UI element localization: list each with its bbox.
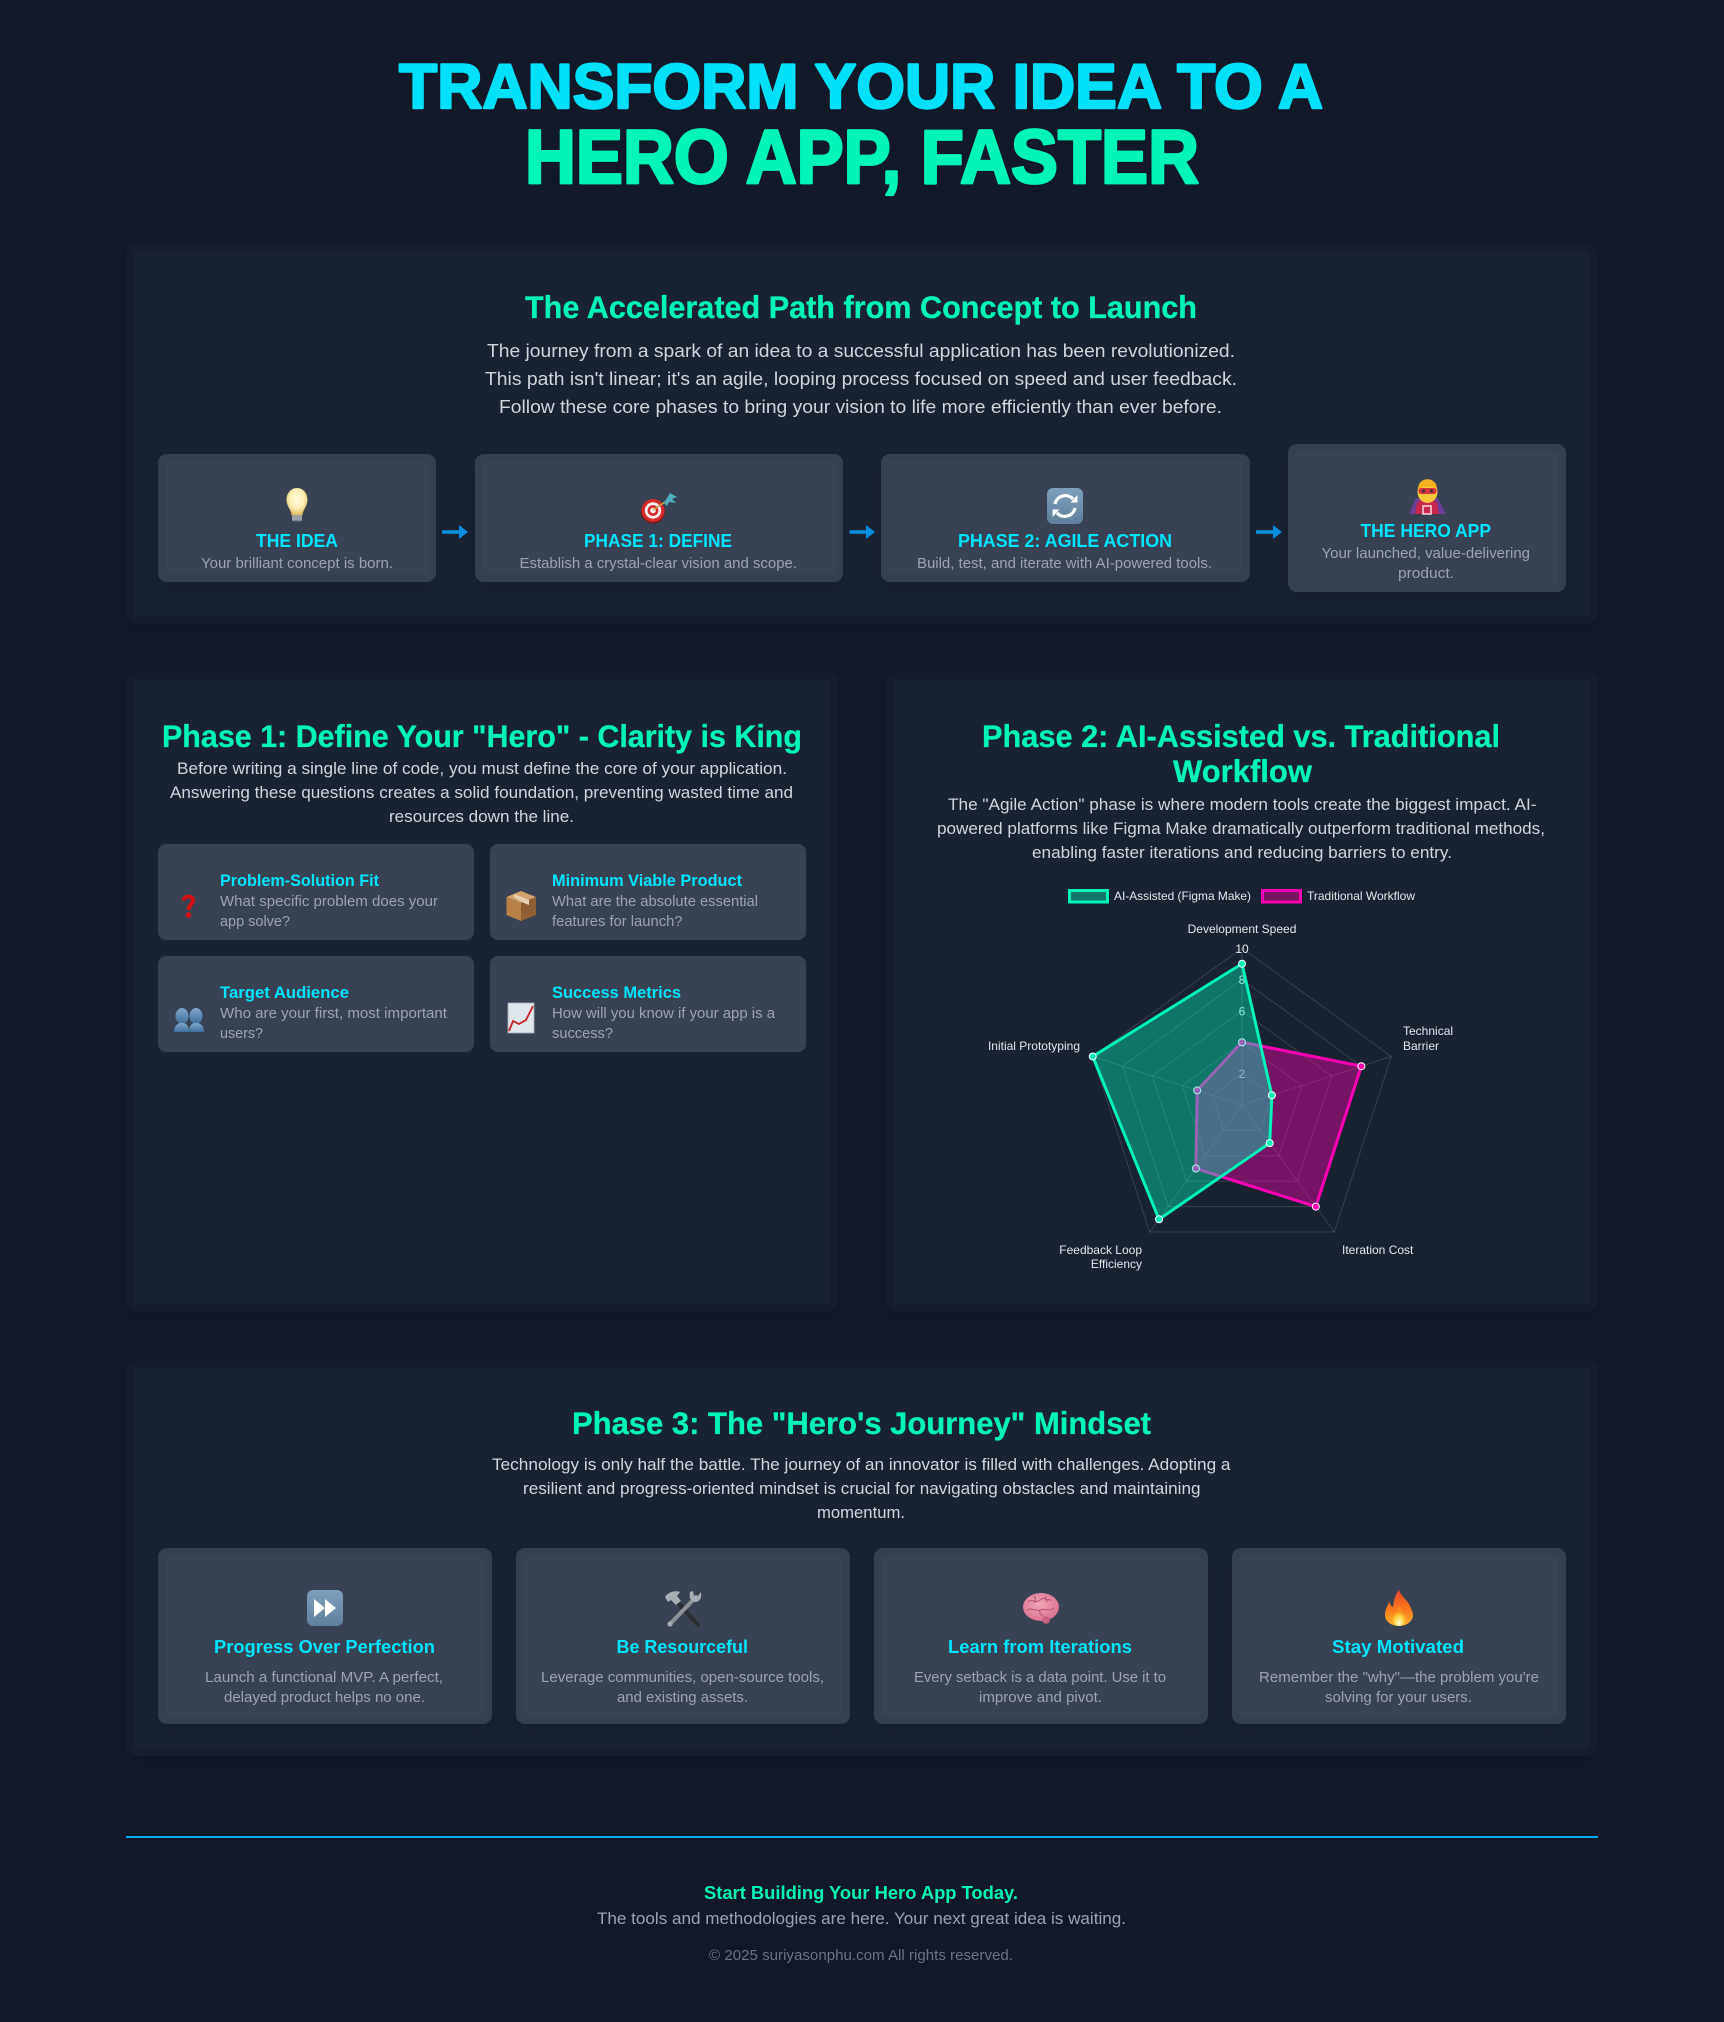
- intro text: phase 1: resources down the line.: [389, 807, 574, 826]
- radar tick labels: 8: [1239, 973, 1246, 987]
- card: target audience: users?: [220, 1026, 263, 1042]
- card: success metrics: success?: [552, 1026, 613, 1042]
- card: problem-solution fit: Problem-Solution Fit: [220, 871, 379, 890]
- card: learn from iterations: Learn from Iterations: [948, 1636, 1132, 1657]
- card: minimum viable product: features for launch?: [552, 914, 682, 930]
- intro text: accelerated path: Follow these core phases to bring your vision to life more efficiently than ever before.: [499, 396, 1222, 417]
- radar axis labels: Technical: [1403, 1024, 1453, 1038]
- icon: hammer and wrench: [665, 1591, 701, 1627]
- icon: target with dart: [641, 493, 677, 524]
- intro text: phase 1: [170, 759, 793, 826]
- intro text: phase 1: Before writing a single line of code, you must define the core of your application.: [177, 759, 787, 778]
- card: success metrics: How will you know if your app is a: [552, 1006, 776, 1022]
- panel: phase 3 hero's journey mindset: [126, 1360, 1598, 1756]
- radar tick labels: [1235, 942, 1249, 1081]
- radar axis labels: Feedback Loop: [1059, 1243, 1142, 1257]
- intro text: accelerated path: This path isn't linear; it's an agile, looping process focused on speed and user feedback.: [485, 368, 1237, 389]
- arrow: agile action to hero app: [1256, 525, 1282, 539]
- card: problem-solution fit: app solve?: [220, 914, 290, 930]
- card: be resourceful: and existing assets.: [617, 1690, 748, 1706]
- radar axis labels: Development Speed: [1188, 922, 1296, 936]
- intro text: phase 3: [492, 1455, 1231, 1522]
- card: the hero app: THE HERO APP: [1360, 520, 1491, 541]
- panel: accelerated path: [126, 244, 1598, 624]
- card: minimum viable product: [490, 844, 806, 940]
- card: the hero app: product.: [1398, 566, 1454, 582]
- card: problem-solution fit: [158, 844, 474, 940]
- intro text: phase 2: The "Agile Action" phase is where modern tools create the biggest impact. AI-: [948, 795, 1536, 814]
- dataset: traditional workflow: [1192, 1039, 1365, 1210]
- card: target audience: Target Audience: [220, 983, 349, 1002]
- card: learn from iterations: [874, 1548, 1208, 1724]
- radar tick labels: 2: [1239, 1067, 1246, 1081]
- card: success metrics: [490, 956, 806, 1052]
- title: HERO APP, FASTER: [525, 115, 1199, 200]
- intro text: phase 1: Answering these questions creates a solid foundation, preventing wasted time and: [170, 783, 793, 802]
- card: the idea: Your brilliant concept is born.: [201, 556, 393, 572]
- heading: phase 3: Phase 3: The "Hero's Journey" Mindset: [572, 1405, 1152, 1441]
- heading: phase 2: [982, 718, 1500, 789]
- intro text: phase 3: Technology is only half the battle. The journey of an innovator is filled with challenges. Adopting a: [492, 1455, 1231, 1474]
- card: target audience: Who are your first, most important: [220, 1006, 447, 1022]
- radar tick labels: 4: [1239, 1036, 1246, 1050]
- icon: refresh arrows: [1047, 488, 1083, 524]
- card: target audience: [158, 956, 474, 1052]
- intro text: phase 3: resilient and progress-oriented mindset is crucial for navigating obstacles and maintaining: [523, 1479, 1200, 1498]
- arrow: define to agile action: [850, 525, 875, 539]
- radar axis labels: Efficiency: [1091, 1257, 1142, 1271]
- card: be resourceful: Leverage communities, open-source tools,: [541, 1670, 824, 1686]
- heading: phase 1: Phase 1: Define Your "Hero" - Clarity is King: [162, 718, 802, 754]
- panel: phase 2 ai-assisted vs traditional: [886, 672, 1598, 1312]
- card: be resourceful: [516, 1548, 850, 1724]
- card: phase 1 define: [475, 454, 843, 582]
- footer headline: Start Building Your Hero App Today.: [704, 1882, 1018, 1903]
- card: phase 2 agile action: Build, test, and iterate with AI-powered tools.: [917, 556, 1212, 572]
- icon: fire: [1385, 1590, 1413, 1626]
- card: the idea: [158, 454, 436, 582]
- icon: fast forward: [307, 1590, 343, 1626]
- radar axis labels: [988, 922, 1453, 1271]
- radar axis labels: Barrier: [1403, 1039, 1439, 1053]
- icon: line chart: [508, 1003, 534, 1033]
- card: progress over perfection: delayed product helps no one.: [224, 1690, 425, 1706]
- card: learn from iterations: improve and pivot.: [979, 1690, 1102, 1706]
- heading: accelerated path: The Accelerated Path from Concept to Launch: [525, 289, 1197, 325]
- heading: phase 2: Phase 2: AI-Assisted vs. Traditional: [982, 718, 1500, 754]
- card: the hero app: [1288, 444, 1566, 592]
- icon: superhero: [1409, 479, 1446, 514]
- panel: phase 1 define your hero: [126, 672, 838, 1312]
- icon: red question mark: [184, 897, 193, 918]
- card: problem-solution fit: What specific problem does your: [220, 894, 438, 910]
- card: phase 1 define: Establish a crystal-clear vision and scope.: [520, 556, 797, 572]
- card: stay motivated: Stay Motivated: [1332, 1636, 1464, 1657]
- chart legend: [1070, 889, 1415, 903]
- icon: users silhouettes: [174, 1008, 204, 1032]
- intro text: phase 2: [937, 795, 1545, 862]
- dataset: ai-assisted: [1089, 960, 1275, 1223]
- icon: brain: [1023, 1593, 1059, 1624]
- card: phase 2 agile action: [881, 454, 1250, 582]
- title: TRANSFORM YOUR IDEA TO A: [399, 52, 1323, 122]
- copyright: © 2025 suriyasonphu.com All rights reserved.: [709, 1948, 1013, 1964]
- intro text: accelerated path: [485, 340, 1237, 417]
- chart legend: Traditional Workflow: [1307, 889, 1415, 903]
- card: phase 1 define: PHASE 1: DEFINE: [584, 530, 732, 551]
- radar axis labels: Initial Prototyping: [988, 1039, 1080, 1053]
- card: the idea: THE IDEA: [256, 530, 338, 551]
- card: the hero app: Your launched, value-delivering: [1322, 546, 1530, 562]
- radar chart: [988, 922, 1453, 1271]
- title: [399, 52, 1323, 200]
- card: minimum viable product: What are the absolute essential: [552, 894, 758, 910]
- card: be resourceful: Be Resourceful: [616, 1636, 748, 1657]
- radar axis labels: Iteration Cost: [1342, 1243, 1414, 1257]
- footer tagline: The tools and methodologies are here. Your next great idea is waiting.: [597, 1909, 1126, 1928]
- chart legend: AI-Assisted (Figma Make): [1114, 889, 1251, 903]
- icon: package box: [506, 891, 536, 921]
- arrow: idea to define: [442, 525, 468, 539]
- intro text: phase 2: enabling faster iterations and reducing barriers to entry.: [1032, 843, 1452, 862]
- footer: [126, 1836, 1598, 1964]
- card: progress over perfection: Launch a functional MVP. A perfect,: [205, 1670, 443, 1686]
- card: progress over perfection: Progress Over Perfection: [214, 1636, 435, 1657]
- radar tick labels: 6: [1239, 1004, 1246, 1018]
- card: stay motivated: [1232, 1548, 1566, 1724]
- heading: phase 2: Workflow: [1173, 753, 1312, 789]
- intro text: phase 2: powered platforms like Figma Make dramatically outperform traditional methods,: [937, 819, 1545, 838]
- card: success metrics: Success Metrics: [552, 983, 681, 1002]
- card: minimum viable product: Minimum Viable Product: [552, 871, 742, 890]
- intro text: accelerated path: The journey from a spark of an idea to a successful application has been revolutionized.: [487, 340, 1235, 361]
- card: stay motivated: Remember the "why"—the problem you're: [1259, 1670, 1539, 1686]
- card: progress over perfection: [158, 1548, 492, 1724]
- intro text: phase 3: momentum.: [817, 1503, 905, 1522]
- card: stay motivated: solving for your users.: [1325, 1690, 1472, 1706]
- radar tick labels: 10: [1235, 942, 1249, 956]
- radar grid: [1093, 948, 1391, 1232]
- icon: light bulb: [286, 488, 308, 522]
- card: phase 2 agile action: PHASE 2: AGILE ACTION: [958, 530, 1172, 551]
- card: learn from iterations: Every setback is a data point. Use it to: [914, 1670, 1166, 1686]
